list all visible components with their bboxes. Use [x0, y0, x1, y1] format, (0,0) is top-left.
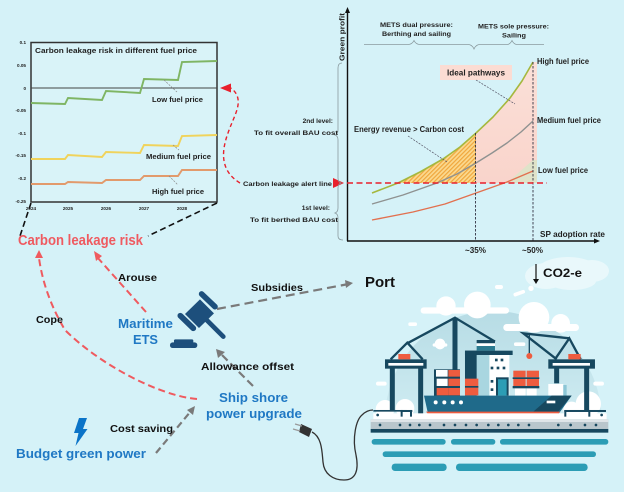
curve labels: High fuel price: [537, 57, 590, 66]
x axis labels: 2026: [101, 206, 112, 211]
y axis labels: -0.1: [18, 131, 26, 136]
line: low fuel price: [31, 61, 217, 104]
y axis labels: 0: [23, 86, 26, 91]
x axis labels: [26, 206, 188, 211]
level annotations: [243, 118, 339, 224]
level annotations: 1st level:: [302, 205, 330, 212]
flow labels: Cost saving: [110, 424, 173, 435]
left brace: [335, 63, 343, 240]
arrow: alert line to leakage chart: [220, 84, 240, 183]
x axis labels: 2028: [177, 206, 188, 211]
flow labels: [36, 273, 303, 435]
label: ship shore power upgrade: [206, 390, 302, 421]
level annotations: To fit overall BAU cost: [254, 130, 339, 137]
x axis labels: 2025: [63, 206, 74, 211]
curve labels: Medium fuel price: [537, 116, 602, 125]
x axis labels: 2027: [139, 206, 150, 211]
heading: port: Port: [365, 275, 395, 291]
METS sole pressure label: [478, 24, 549, 40]
arrow: cost saving: [156, 406, 195, 453]
label: ship shore power upgrade: Ship shore: [219, 390, 288, 405]
curve: medium fuel price: [372, 121, 533, 204]
clouds: [376, 285, 604, 419]
callout: energy revenue: Energy revenue > Carbon cost: [354, 125, 464, 134]
METS dual pressure label: Berthing and sailing: [382, 31, 451, 38]
black dashed zoom connectors: [20, 203, 217, 236]
axes: [345, 7, 600, 244]
water: [372, 439, 608, 471]
background globe: [385, 311, 602, 419]
series labels: Low fuel price: [152, 95, 203, 104]
METS dual pressure label: [380, 22, 453, 38]
series labels: Medium fuel price: [146, 152, 211, 161]
callout: ideal pathways: [440, 65, 515, 104]
arrow: cope: [35, 250, 197, 399]
panel: green profit chart: [243, 7, 606, 255]
curve labels: Low fuel price: [538, 166, 589, 175]
label: ship shore power upgrade: power upgrade: [206, 406, 302, 421]
label: maritime ETS: [118, 316, 173, 347]
series labels: High fuel price: [152, 187, 204, 196]
flow labels: Allowance offset: [201, 362, 295, 373]
arrow: subsidies: [217, 280, 353, 309]
y axis labels: 0.1: [20, 40, 26, 45]
curve labels: ~50%: [522, 246, 543, 255]
METS sole pressure label: METS sole pressure:: [478, 24, 549, 30]
region: low price tint: [507, 160, 537, 183]
line: medium fuel price: [31, 135, 217, 159]
curve labels: [465, 57, 606, 255]
arrow: allowance offset: [216, 349, 253, 386]
flow labels: Arouse: [118, 273, 157, 284]
icon: power plug and cable: [293, 410, 373, 480]
axis title: green profit: Green profit: [338, 12, 346, 61]
carbon leakage alert line: [347, 182, 547, 184]
curve labels: SP adoption rate: [540, 230, 606, 239]
left crane: [391, 318, 495, 417]
pier: [373, 413, 607, 419]
leader lines: [164, 80, 179, 185]
METS dual pressure label: METS dual pressure:: [380, 22, 453, 29]
METS sole pressure label: Sailing: [502, 32, 526, 40]
level annotations: 2nd level:: [303, 118, 333, 125]
y axis labels: -0.2: [18, 176, 26, 181]
callout: CO2-e reduction cloud: [525, 257, 609, 290]
chart title: Carbon leakage risk in different fuel price: [35, 46, 197, 55]
curve: low fuel price: [372, 171, 533, 220]
x axis labels: 2024: [26, 206, 37, 211]
panel: carbon leakage line chart: [16, 40, 217, 211]
funnel and bridge: [477, 340, 495, 343]
containers: [434, 369, 460, 396]
region: ideal pathways: [476, 62, 537, 183]
callout: ideal pathways: Ideal pathways: [447, 68, 505, 78]
label: maritime ETS: ETS: [133, 332, 158, 347]
region: energy revenue hatch: [398, 133, 476, 183]
y axis labels: 0.05: [17, 63, 26, 68]
threshold verticals: [476, 62, 533, 241]
label: budget green power: Budget green power: [16, 446, 146, 461]
y axis labels: -0.15: [16, 153, 26, 158]
flow labels: Subsidies: [251, 283, 303, 294]
icon: lightning bolt: [74, 418, 88, 446]
series labels: [146, 95, 211, 196]
alert marker: [333, 178, 344, 188]
arrow: arouse: [94, 251, 146, 312]
y axis labels: [16, 40, 26, 204]
zero line: [31, 87, 217, 89]
heading: carbon leakage risk: Carbon leakage risk: [18, 233, 144, 249]
label: maritime ETS: Maritime: [118, 316, 173, 331]
icon: gavel: [170, 294, 223, 348]
top brace: [364, 40, 544, 49]
y axis labels: -0.05: [16, 108, 26, 113]
line: high fuel price: [31, 170, 217, 184]
ship hull: [424, 396, 572, 417]
y axis labels: -0.25: [16, 199, 26, 204]
curve labels: ~35%: [465, 246, 486, 255]
level annotations: Carbon leakage alert line: [243, 181, 332, 188]
callout: CO2-e reduction cloud: CO2-e: [543, 266, 582, 280]
level annotations: To fit berthed BAU cost: [250, 217, 339, 224]
icon: down arrow: [533, 264, 539, 284]
illustration: port with ship: [371, 285, 608, 471]
right crane: [523, 333, 587, 410]
curve: high fuel price: [372, 62, 533, 193]
flow labels: Cope: [36, 315, 63, 326]
callout: energy revenue: [354, 125, 464, 162]
